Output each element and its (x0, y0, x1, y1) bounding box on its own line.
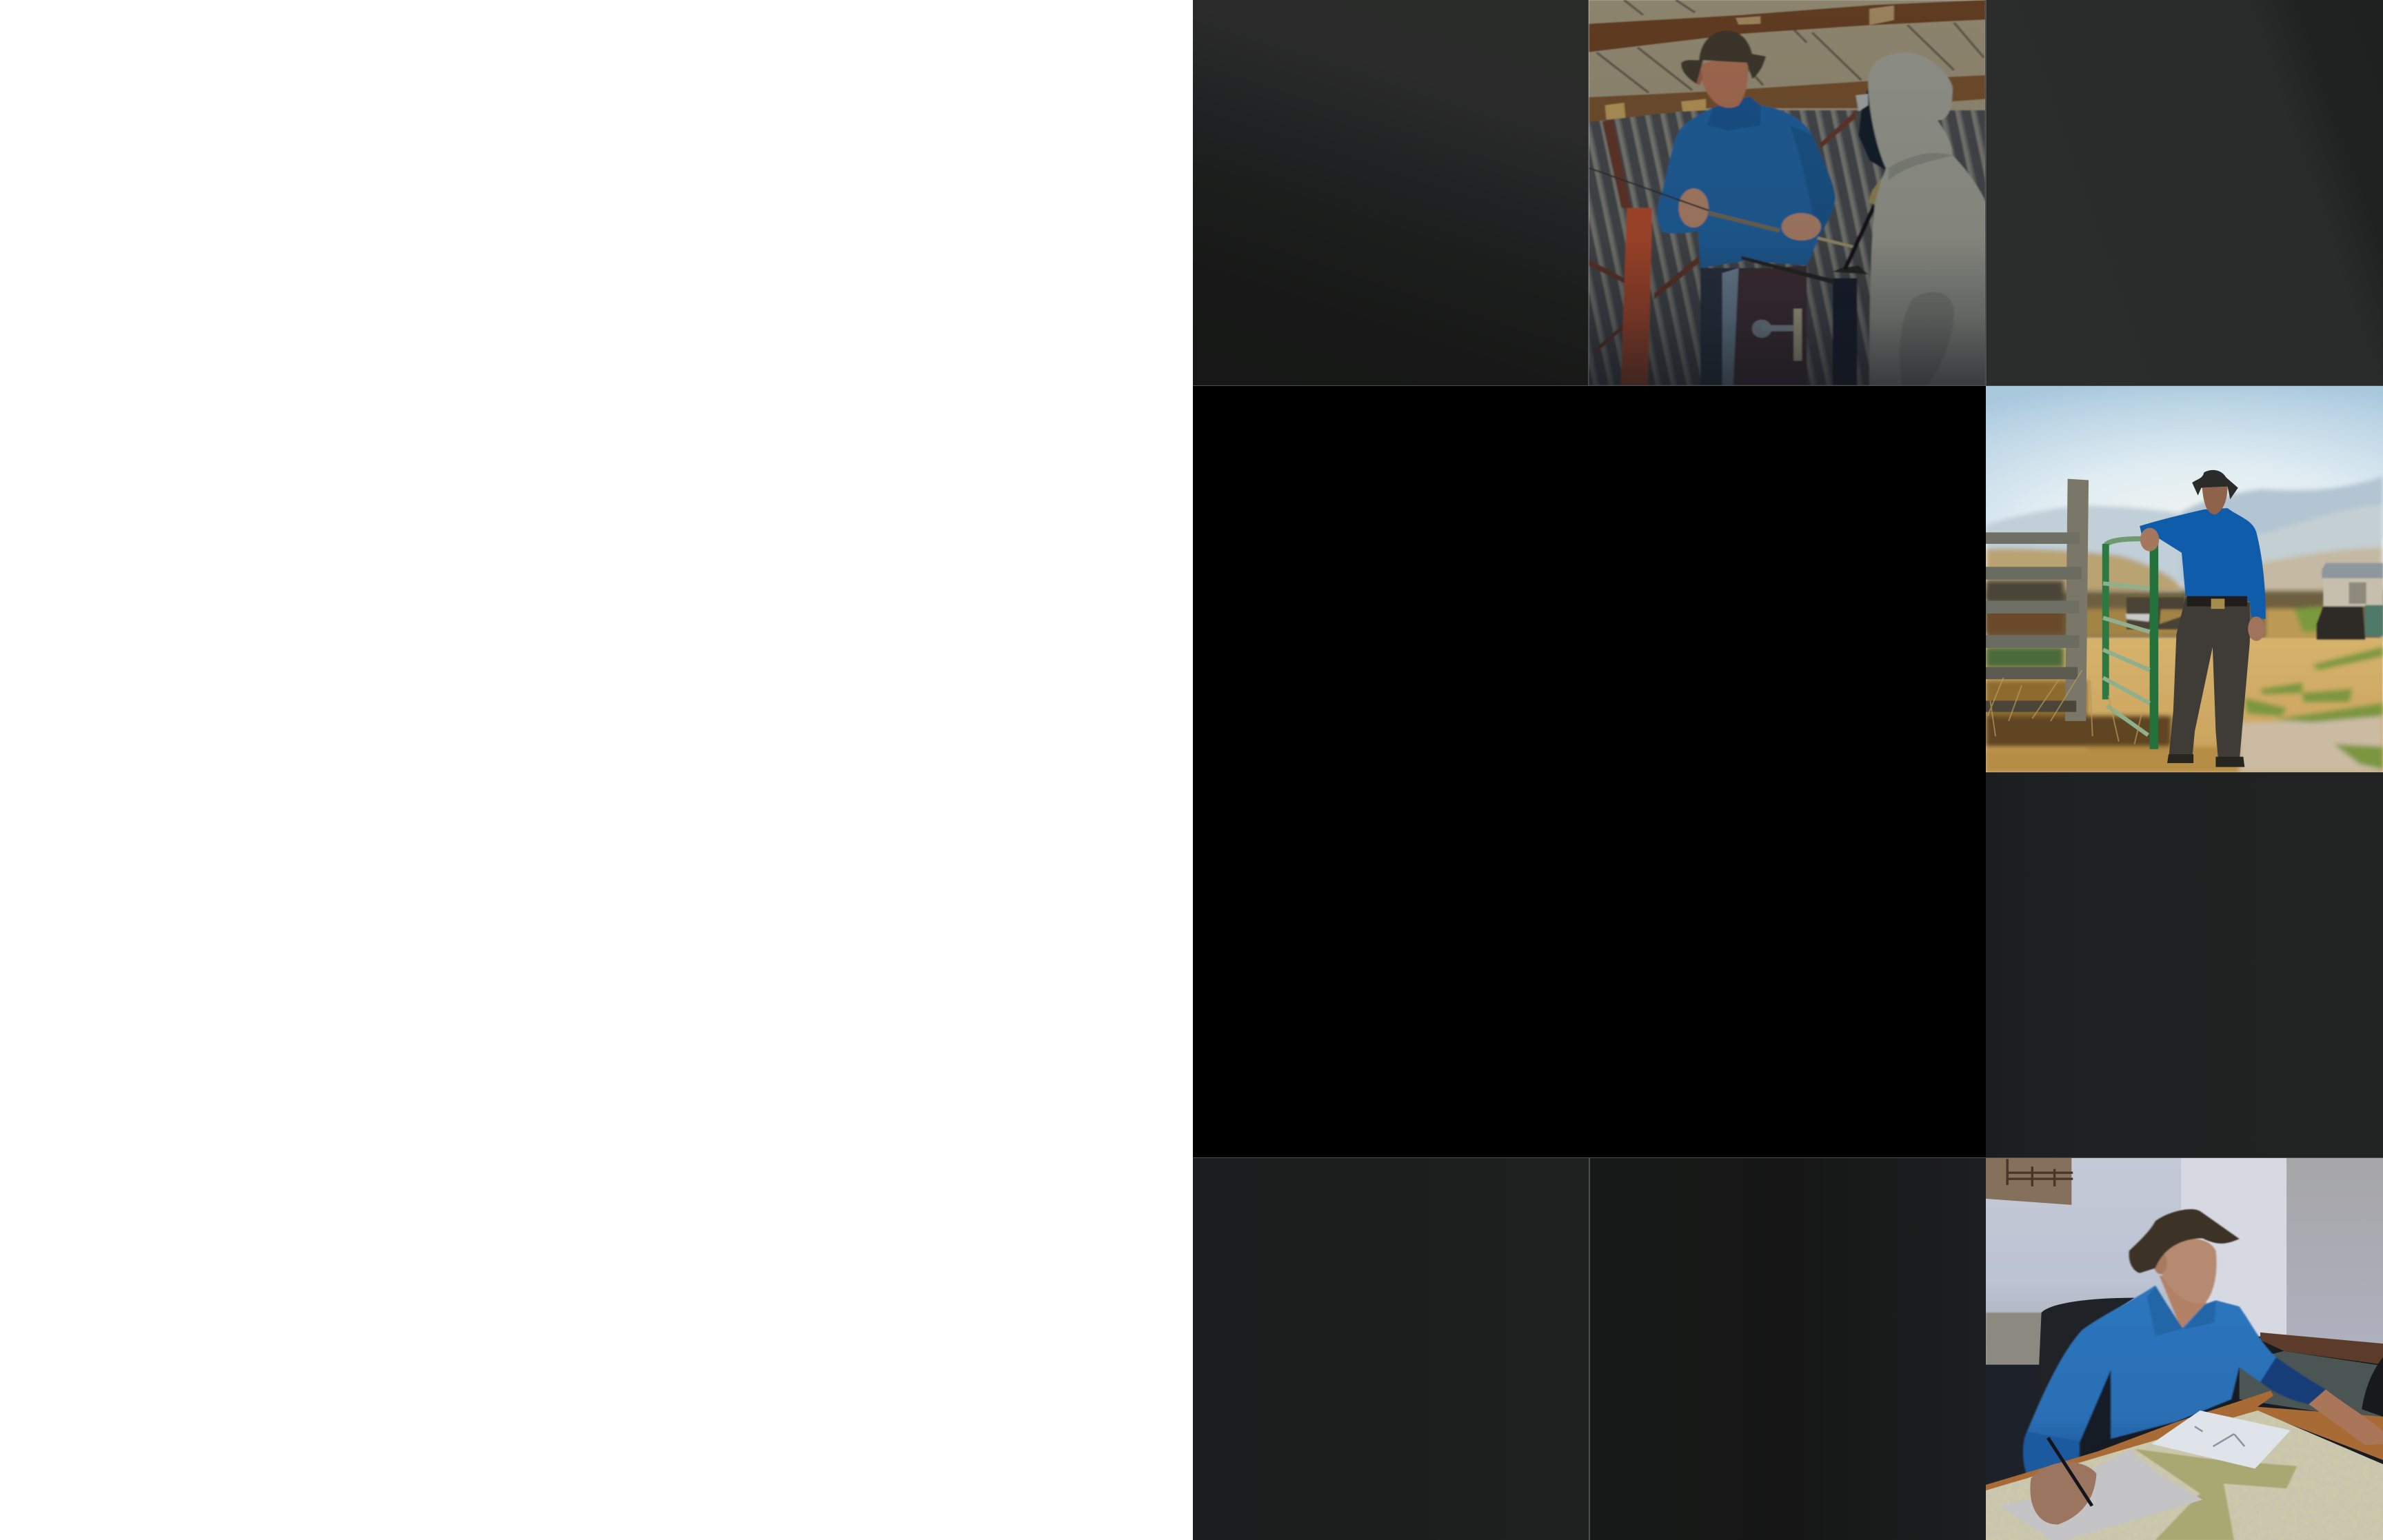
field and track (1986, 581, 2383, 772)
right hand (2309, 1390, 2383, 1445)
walls (1986, 1158, 2383, 1366)
photo: man leaning on green gate at ranch (1986, 386, 2383, 772)
sky (1986, 386, 2383, 539)
writing hand and pen (2030, 1438, 2096, 1524)
green gate (2102, 539, 2158, 749)
panel: dark tile middle right (1986, 773, 2383, 1158)
man in blue shirt (1589, 30, 1853, 385)
panel: dark tile bottom left (1193, 1158, 1589, 1540)
panel: large black centre square (1193, 386, 1986, 1158)
dry grass at fence base (1988, 670, 2142, 744)
shed roof and wall (1589, 0, 1986, 385)
panel: blank white left column (0, 0, 1193, 1540)
struts and red post (1589, 110, 1856, 385)
roof beams (1589, 0, 1986, 122)
panel: dark tile bottom centre (1589, 1158, 1986, 1540)
man in blue shirt (2140, 470, 2266, 767)
man in blue shirt (2023, 1209, 2326, 1476)
paper sheets (2001, 1450, 2202, 1540)
panel: dark tile top left (1193, 0, 1589, 385)
vise and toolbox (1722, 205, 1874, 385)
wooden fence (1986, 479, 2089, 721)
hooded worker (1856, 52, 1986, 385)
dark base behind figure (1986, 1158, 2383, 1540)
photo: man in blue shirt with hooded worker in a shed (1589, 0, 1985, 385)
wall plaque (1986, 1158, 2073, 1205)
chair (2038, 1298, 2135, 1449)
table frame and relief map (1986, 1390, 2383, 1540)
photo tone overlay (1589, 0, 1986, 385)
photo: man at desk writing over relief map (1986, 1158, 2383, 1540)
mountains and hills (1986, 476, 2383, 609)
panel: dark tile top right (1986, 0, 2383, 385)
notepad (2151, 1410, 2291, 1469)
trailer and machinery (2125, 563, 2383, 640)
grid hairlines (1193, 0, 2383, 1540)
wainscot (1986, 1333, 2383, 1485)
